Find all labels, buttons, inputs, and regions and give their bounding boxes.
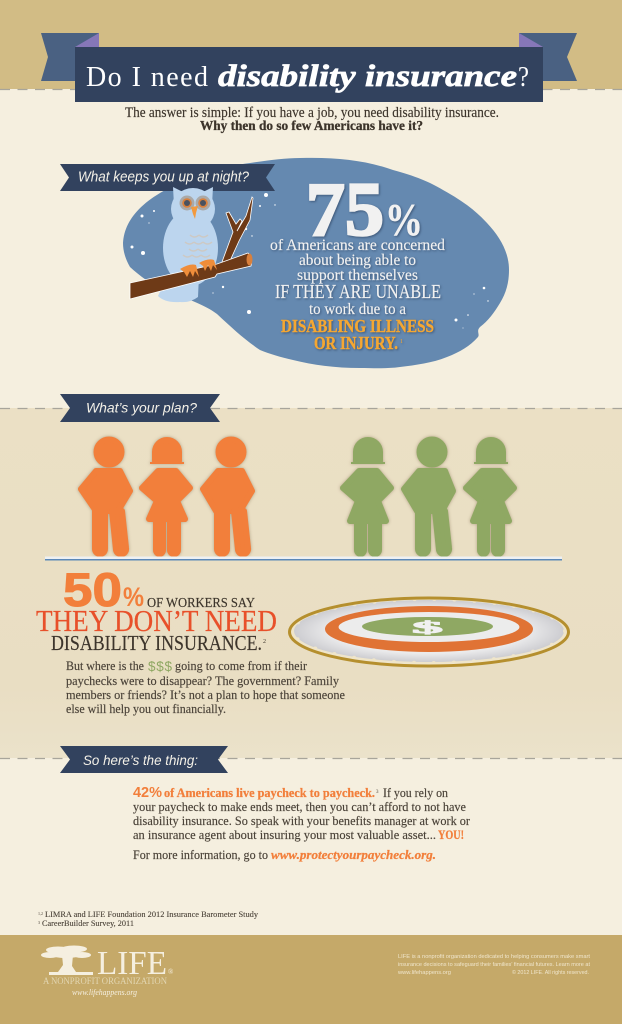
paragraph: living paycheck to paycheck: of Americans live paycheck to paycheck. — [164, 786, 375, 800]
logo: LIFE tree — [41, 945, 174, 997]
footnotes: 1,2 — [38, 911, 43, 917]
ribbon: so here's the thing — [60, 746, 228, 773]
logo: LIFE tree: ® — [168, 968, 174, 976]
icon: plate with dollar sign — [290, 598, 568, 666]
text: concern statement — [270, 237, 445, 318]
logo: LIFE tree: LIFE — [97, 945, 167, 982]
icon: orange figures — [81, 440, 252, 554]
stat: 50 percent of workers: % — [123, 582, 144, 612]
stat: 50 percent of workers: OF WORKERS SAY — [147, 595, 255, 610]
icon: owl on branch — [130, 187, 253, 302]
footnotes — [38, 909, 259, 928]
footer about text: LIFE is a nonprofit organization dedicated to helping consumers make smart — [398, 954, 590, 960]
owl eyes — [180, 196, 210, 210]
panel: night-time speech blob — [123, 158, 509, 368]
footer band — [0, 935, 622, 1024]
stat: 75 percent — [306, 168, 423, 252]
paragraph: where will the money come from: $$$ — [148, 659, 172, 674]
footnotes: 3 — [38, 920, 40, 925]
plan section band — [0, 408, 622, 758]
orange boy 1 — [81, 440, 130, 554]
title emphasis: disability insurance — [218, 58, 517, 93]
ribbon: what's your plan: What’s your plan? — [86, 400, 197, 416]
text: concern statement: to work due to a — [309, 301, 406, 318]
branch — [222, 197, 253, 263]
owl feathers — [183, 235, 212, 257]
paragraph: living paycheck to paycheck: your paycheck to make ends meet, then you can’t afford to not have — [133, 800, 466, 814]
intro text — [125, 105, 499, 134]
header band — [0, 0, 622, 89]
ribbon: so here's the thing: So here’s the thing: — [83, 752, 198, 768]
green boy — [404, 440, 453, 554]
ribbon: what's your plan — [60, 394, 220, 422]
footer about text: www.lifehappens.org — [397, 970, 451, 976]
owl body — [158, 187, 218, 302]
logo: LIFE tree: www.lifehappens.org — [72, 988, 137, 997]
text: disabling illness or injury — [281, 316, 434, 353]
paragraph: where will the money come from: paychecks were to disappear? The government? Family — [66, 674, 340, 688]
paragraph: where will the money come from — [66, 659, 345, 716]
paragraph: living paycheck to paycheck: For more information, go to — [133, 848, 268, 862]
paragraph: living paycheck to paycheck: YOU! — [438, 828, 464, 842]
paragraph: living paycheck to paycheck: 42% — [133, 784, 162, 801]
paragraph: living paycheck to paycheck — [133, 784, 471, 862]
footnotes: LIMRA and LIFE Foundation 2012 Insurance Barometer Study — [45, 909, 259, 919]
text: disabling illness or injury: 1 — [400, 339, 403, 345]
paragraph: living paycheck to paycheck: If you rely on — [383, 786, 449, 800]
ribbon: what keeps you up at night — [60, 164, 275, 191]
owl beak — [191, 206, 198, 219]
stat: 50 percent of workers: THEY DON’T NEED — [36, 603, 277, 638]
icon: tree — [41, 946, 93, 975]
paragraph: where will the money come from: else will help you out financially. — [66, 702, 226, 716]
text: concern statement: about being able to — [299, 252, 416, 269]
orange girl — [142, 440, 190, 554]
ribbon: what keeps you up at night: What keeps you up at night? — [78, 170, 250, 186]
footer about text: insurance decisions to safeguard their families’ financial futures. Learn more at — [398, 962, 590, 968]
icon: green figures — [343, 440, 514, 554]
paragraph: where will the money come from: members or friends? It’s not a plan to hope that someone — [66, 688, 345, 702]
footer about text: © 2012 LIFE. All rights reserved. — [512, 969, 589, 976]
logo: LIFE tree: A NONPROFIT ORGANIZATION — [43, 976, 167, 986]
green girl 2 — [466, 440, 514, 554]
text: disabling illness or injury: DISABLING ILLNESS — [281, 316, 434, 336]
stat: 75 percent: % — [385, 194, 423, 245]
stat: 50 percent of workers: 50 — [63, 563, 122, 616]
intro text: Why then do so few Americans have it? — [200, 119, 423, 134]
orange boy 2 — [203, 440, 252, 554]
stat: 50 percent of workers — [36, 563, 277, 655]
paragraph: living paycheck to paycheck: disability insurance. So speak with your benefits manager at work or — [133, 814, 471, 828]
stars — [130, 193, 489, 328]
ground line — [45, 556, 562, 560]
owl feet — [180, 264, 199, 277]
dollar sign: $ — [412, 618, 445, 637]
green girl 1 — [343, 440, 391, 554]
paragraph: where will the money come from: But where is the — [66, 659, 144, 673]
paragraph: where will the money come from: going to come from if their — [175, 659, 308, 673]
stat: 75 percent: 75 — [306, 168, 384, 252]
title text: Do I need — [86, 62, 208, 93]
text: concern statement: IF THEY ARE UNABLE — [275, 282, 441, 303]
paragraph: living paycheck to paycheck: an insurance agent about insuring your most valuable asset... — [133, 828, 436, 842]
paragraph: living paycheck to paycheck: 3 — [376, 790, 379, 795]
paragraph: living paycheck to paycheck: www.protectyourpaycheck.org. — [271, 848, 436, 862]
text: disabling illness or injury: OR INJURY. — [314, 333, 398, 353]
stat: 50 percent of workers: 2 — [263, 639, 266, 645]
intro text: The answer is simple: If you have a job, you need disability insurance. — [125, 105, 499, 121]
footnotes: CareerBuilder Survey, 2011 — [42, 918, 134, 928]
title question mark: ? — [518, 62, 529, 93]
text: concern statement: support themselves — [297, 267, 418, 284]
stat: 50 percent of workers: DISABILITY INSURANCE. — [51, 631, 262, 655]
text: concern statement: of Americans are concerned — [270, 237, 445, 254]
footer about text — [397, 954, 590, 976]
title banner — [41, 33, 577, 102]
